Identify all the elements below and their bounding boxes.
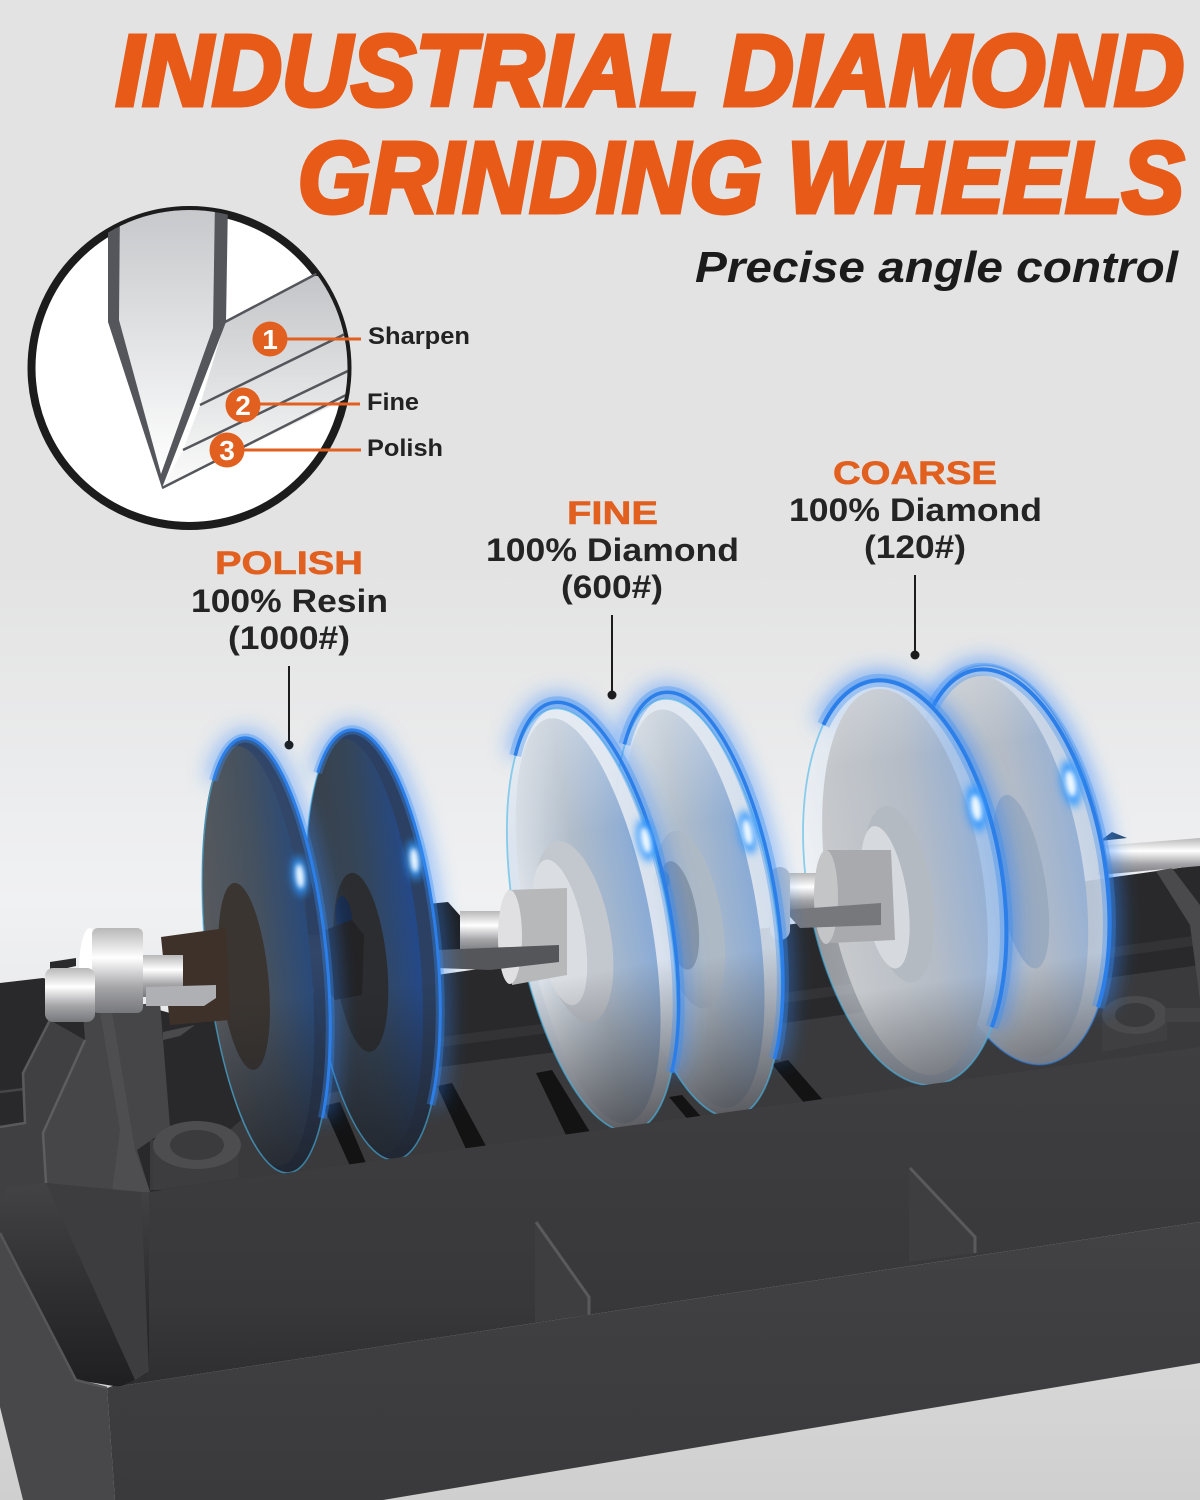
callout: polish (210, 432, 443, 468)
callout: fine: 2 (235, 390, 251, 421)
side compartment wall (0, 1183, 149, 1387)
label: fine wheel: (600#) (561, 569, 663, 605)
label: coarse wheel: (120#) (864, 529, 966, 565)
callout: polish: 3 (219, 435, 235, 466)
tray ledge (440, 935, 1200, 1047)
label: fine wheel: FINE (567, 495, 658, 531)
coarse wheel back (884, 650, 1140, 1080)
label: polish wheel: (1000#) (228, 620, 350, 656)
label: coarse wheel (789, 455, 1042, 565)
glint (633, 817, 659, 864)
coarse wheel front (776, 664, 1034, 1100)
label: polish wheel (191, 545, 388, 656)
hub (852, 801, 945, 987)
hub (325, 870, 396, 1055)
blade angle diagram (32, 200, 360, 526)
floor slots (323, 1060, 823, 1166)
label: fine wheel (486, 495, 739, 605)
label: polish wheel: POLISH (215, 545, 363, 581)
hub (643, 825, 737, 1014)
polish wheel front (183, 731, 349, 1179)
glint (1057, 758, 1085, 809)
polish wheel back (287, 723, 459, 1167)
pointer: coarse (910, 575, 920, 660)
label: polish wheel: 100% Resin (191, 583, 388, 619)
axle right end (1098, 832, 1200, 875)
glint (290, 855, 310, 897)
pointer: fine (608, 615, 616, 700)
title: INDUSTRIAL DIAMOND (116, 15, 1184, 127)
tray: left support (0, 1002, 195, 1300)
fine wheel back (585, 679, 812, 1130)
screw post left (150, 1121, 241, 1190)
glint (735, 809, 760, 855)
subtitle: Precise angle control (695, 243, 1179, 292)
glint (404, 839, 424, 881)
divider two (909, 1168, 975, 1262)
outer left face (0, 1233, 115, 1500)
callout: sharpen: 1 (262, 324, 278, 355)
knife blade (108, 200, 228, 488)
polish axle end (45, 928, 230, 1025)
hub (210, 880, 278, 1072)
callout: polish: Polish (367, 435, 443, 462)
outer front wall (107, 1222, 1200, 1500)
hub (521, 834, 627, 1029)
tray: front section (0, 1047, 1200, 1500)
tray floor (151, 965, 1200, 1200)
label: coarse wheel: 100% Diamond (789, 492, 1042, 528)
screw post right (1102, 996, 1200, 1052)
glint (963, 783, 990, 833)
pointer: polish (284, 666, 294, 750)
inner wall (107, 1047, 1200, 1388)
axle between polish wheels (302, 920, 364, 1000)
callout: sharpen: Sharpen (368, 323, 470, 350)
callout: fine: Fine (367, 389, 419, 416)
grinding bands (162, 272, 360, 488)
fine wheel front (475, 688, 710, 1146)
title (116, 15, 1184, 234)
callout: fine (226, 388, 419, 422)
right rib (1156, 868, 1200, 1000)
label: fine wheel: 100% Diamond (486, 532, 739, 568)
fine collar and shaft (418, 888, 567, 985)
callout: sharpen (252, 322, 470, 356)
label: coarse wheel: COARSE (833, 455, 997, 491)
coarse collar and shaft (770, 850, 895, 944)
tray: back interior (0, 865, 1200, 1230)
hub (982, 791, 1060, 973)
divider one (535, 1222, 589, 1322)
